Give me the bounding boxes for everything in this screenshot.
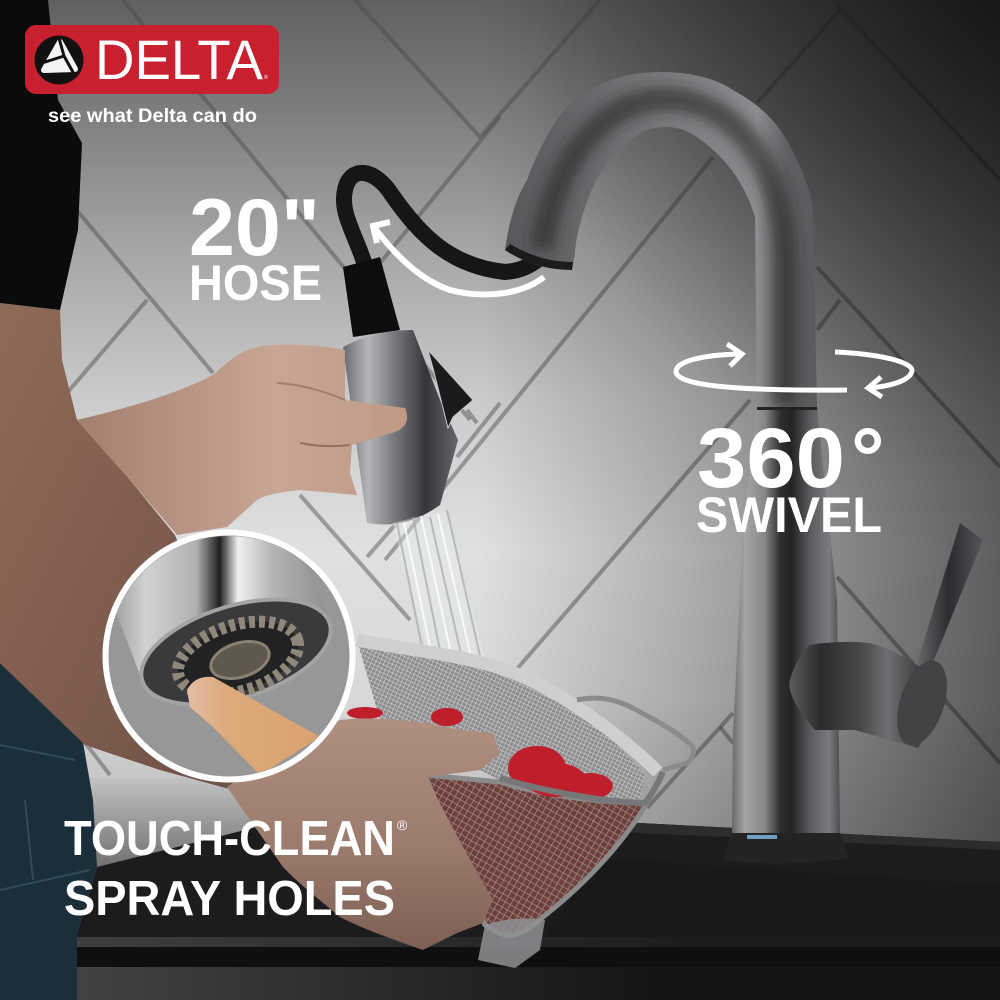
handle mount <box>789 642 948 748</box>
wet rim <box>357 640 658 772</box>
fingernail <box>373 408 406 433</box>
callout: touch-clean spray holes: ® <box>397 817 408 833</box>
callout: touch-clean spray holes: SPRAY HOLES <box>64 872 395 926</box>
black sleeve <box>0 0 82 310</box>
spray head <box>343 257 473 525</box>
callout: 360 swivel: 360 <box>697 411 845 505</box>
faucet <box>500 60 983 864</box>
handle lever <box>915 523 983 677</box>
herringbone tile pattern <box>67 0 1000 808</box>
callout: 20 inch hose <box>189 183 322 311</box>
logo: Delta <box>25 25 279 127</box>
jeans <box>0 663 97 1000</box>
faucet gooseneck <box>500 60 830 410</box>
inset: touch-clean spray holes <box>100 530 352 780</box>
spray button <box>428 350 473 428</box>
callout: touch-clean spray holes <box>64 812 408 926</box>
braided hose <box>344 173 540 272</box>
inset chrome barrel <box>116 536 306 673</box>
faucet base with light <box>723 833 850 864</box>
colander outer bowl <box>425 775 647 935</box>
counter and sink <box>77 778 1000 1000</box>
inset spray face <box>140 598 332 706</box>
callout: 20 inch hose: 20" <box>189 183 320 273</box>
colander with berries <box>347 640 693 968</box>
inset finger <box>187 677 320 775</box>
callout: touch-clean spray holes: TOUCH-CLEAN <box>64 812 395 866</box>
faucet body <box>732 407 840 833</box>
callout: 360 swivel: SWIVEL <box>696 487 882 543</box>
colander handle <box>577 698 693 770</box>
hose connector <box>343 257 400 337</box>
callout: 360 swivel: ° <box>851 411 885 505</box>
callout: 360 swivel <box>696 411 885 543</box>
upper hand <box>77 345 407 535</box>
colander inner mesh <box>357 640 645 800</box>
logo mark <box>34 36 84 84</box>
tagline: see what Delta can do <box>48 105 257 127</box>
arm <box>0 303 240 790</box>
callout: 20 inch hose: HOSE <box>189 255 322 311</box>
lower hand <box>227 718 500 950</box>
arrows: swivel rotation <box>676 344 912 397</box>
logo: Delta: DELTA <box>95 28 264 91</box>
water splash <box>478 918 545 968</box>
water stream <box>392 510 495 707</box>
berries <box>347 707 613 799</box>
chrome barrel <box>343 330 458 525</box>
arrow: hose extension <box>373 222 544 294</box>
logo: Delta: ® <box>264 74 268 81</box>
